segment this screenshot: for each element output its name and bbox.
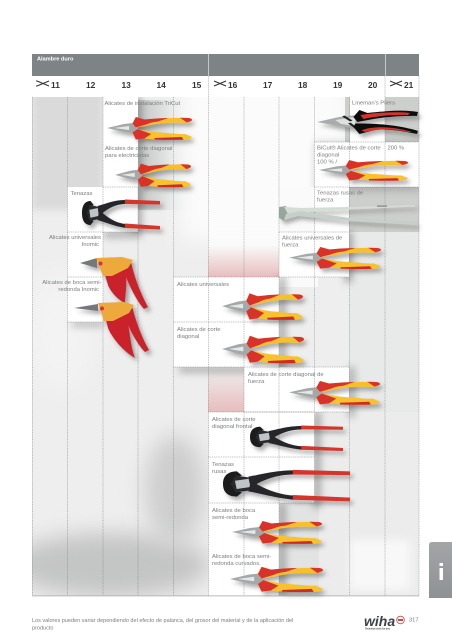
scale row: wire diameter numbers: 12 — [86, 80, 96, 90]
pliers: corte diagonal para electricistas — [115, 163, 191, 187]
white product panels — [68, 97, 419, 596]
header bar: Alambre duro: Alambre duro — [37, 56, 74, 62]
pliers: boca semi-redonda — [232, 521, 322, 544]
grid lines — [32, 76, 419, 596]
label: corte diagonal frontal: Alicates de corte — [212, 417, 256, 423]
pliers: boca semi-redonda curvados — [230, 567, 323, 592]
pliers: corte diagonal frontal — [250, 426, 343, 451]
pliers: tenazas rusas — [223, 470, 350, 501]
label: 200 %: 200 % — [388, 146, 405, 152]
pliers: tenazas rusas de fuerza — [279, 205, 417, 225]
label: boca semi-redonda: semi-redonda — [212, 515, 249, 521]
label: universales Inomic: Inomic — [82, 242, 99, 248]
label: corte diagonal frontal: diagonal frontal — [212, 424, 252, 430]
label: corte diagonal de fuerza: Alicates de corte diagonal de — [248, 372, 324, 378]
label: corte diagonal para electricistas: Alicates de corte diagonal — [105, 146, 172, 152]
shadows under white panels — [72, 97, 421, 596]
pliers: boca semi-redonda Inomic — [74, 302, 149, 358]
label: corte diagonal de fuerza: fuerza — [248, 379, 265, 385]
label: universales de fuerza: fuerza — [282, 242, 299, 248]
label: BiCut: 100 % / — [317, 160, 337, 166]
scale row: wire diameter numbers: 17 — [263, 80, 273, 90]
pliers: instalación TriCut — [107, 117, 192, 140]
label: boca semi-redonda Inomic: Alicates de boca semi- — [42, 280, 102, 286]
label: corte diagonal: Alicates de corte — [177, 327, 221, 333]
scale row: wire diameter numbers: 18 — [298, 80, 308, 90]
label: boca semi-redonda curvados: redonda curvados. — [212, 561, 261, 567]
label: boca semi-redonda Inomic: redonda Inomic — [58, 287, 99, 293]
pliers: universales de fuerza — [289, 247, 381, 269]
icon: scissors 21 — [390, 81, 402, 86]
scale row: wire diameter numbers: 20 — [368, 80, 378, 90]
label: tenazas rusas: Tenazas — [212, 462, 234, 468]
label: universales de fuerza: Alicates universales de — [282, 236, 342, 242]
label: BiCut: diagonal — [317, 152, 339, 158]
label: instalación TriCut: Alicates de instalación TriCut — [104, 101, 180, 107]
scale row: wire diameter numbers: 19 — [333, 80, 343, 90]
scale row: wire diameter numbers: 16 — [228, 80, 238, 90]
label: universales: Alicates universales — [177, 282, 229, 288]
label: tenazas: Tenazas — [70, 191, 92, 197]
icon: scissors 16 — [214, 81, 226, 86]
scale row: wire diameter numbers: 13 — [122, 80, 131, 90]
label: tenazas rusas de fuerza: Tenazas rusas de — [317, 190, 363, 196]
logo: wiha: wiha — [364, 613, 395, 629]
scale row: wire diameter numbers: 21 — [404, 80, 414, 90]
pliers: BiCut — [319, 160, 408, 181]
pliers: Lineman's — [317, 110, 418, 134]
label: tenazas rusas de fuerza: fuerza — [317, 197, 334, 203]
logo: wiha: Technical tools for you — [365, 628, 391, 630]
scale row: wire diameter numbers: 14 — [156, 80, 166, 90]
label: boca semi-redonda curvados: Alicates de boca semi- — [212, 554, 271, 560]
scale row: wire diameter numbers: 11 — [51, 80, 60, 90]
page number: 317 — [409, 618, 418, 624]
icon: scissors 11 — [36, 81, 49, 86]
label: tenazas rusas: rusas — [212, 469, 226, 475]
pliers: corte diagonal de fuerza — [289, 381, 380, 405]
label: corte diagonal: diagonal — [177, 334, 199, 340]
label: boca semi-redonda: Alicates de boca — [212, 508, 255, 514]
pliers: universales Inomic — [80, 257, 148, 309]
pliers: tenazas — [82, 200, 160, 230]
scale row: wire diameter numbers: 15 — [192, 80, 202, 90]
label: universales Inomic: Alicates universales — [49, 235, 101, 241]
chart background — [32, 97, 419, 596]
header bar: Alambre duro — [32, 54, 419, 76]
pliers: corte diagonal — [222, 336, 304, 363]
label: BiCut: BiCut® Alicates de corte — [317, 146, 381, 152]
label: Lineman's Pliers: Lineman's Pliers — [352, 100, 395, 106]
pliers: universales — [222, 293, 303, 320]
footer note: producto — [32, 625, 53, 631]
label: corte diagonal para electricistas: para electricistas — [105, 153, 149, 159]
footer note: Los valores pueden variar dependiendo del efecto de palanca, del grosor del material y de la aplicación del — [32, 618, 293, 624]
info tab — [429, 542, 452, 598]
scale row: wire diameter numbers — [36, 80, 414, 90]
